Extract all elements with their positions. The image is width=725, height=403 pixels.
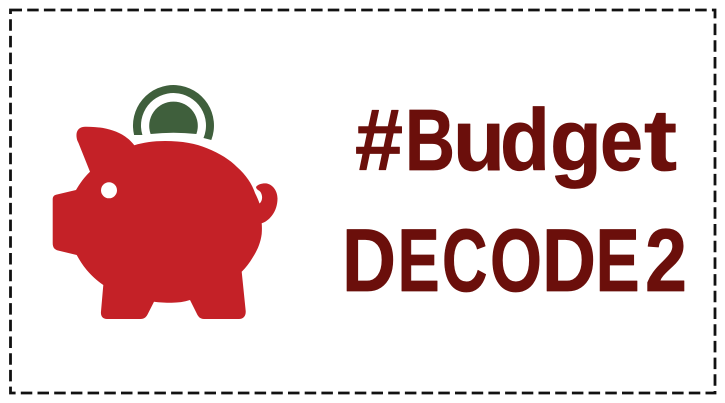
heading: DECODE2: D	[542, 210, 596, 310]
heading: DECODE2	[342, 210, 687, 310]
heading: #Budget: t	[644, 92, 677, 189]
icon: coin	[133, 85, 214, 140]
heading: DECODE2: D	[342, 210, 396, 310]
heading: #Budget: u	[453, 92, 505, 189]
heading: DECODE2: E	[398, 210, 440, 310]
heading: DECODE2: C	[442, 210, 488, 310]
heading: #Budget: g	[550, 92, 602, 189]
heading: #Budget: e	[600, 92, 643, 189]
icon: piggy bank with coin	[53, 85, 278, 319]
heading: DECODE2: E	[596, 210, 640, 310]
icon: pig body	[53, 127, 278, 319]
heading: DECODE2: 2	[645, 210, 687, 310]
heading: DECODE2: O	[490, 210, 542, 310]
heading: #Budget: B	[405, 92, 455, 189]
heading: #Budget	[355, 92, 677, 189]
heading: #Budget: #	[355, 92, 403, 189]
icon: pig eye	[101, 182, 117, 198]
heading: #Budget: d	[500, 92, 550, 189]
